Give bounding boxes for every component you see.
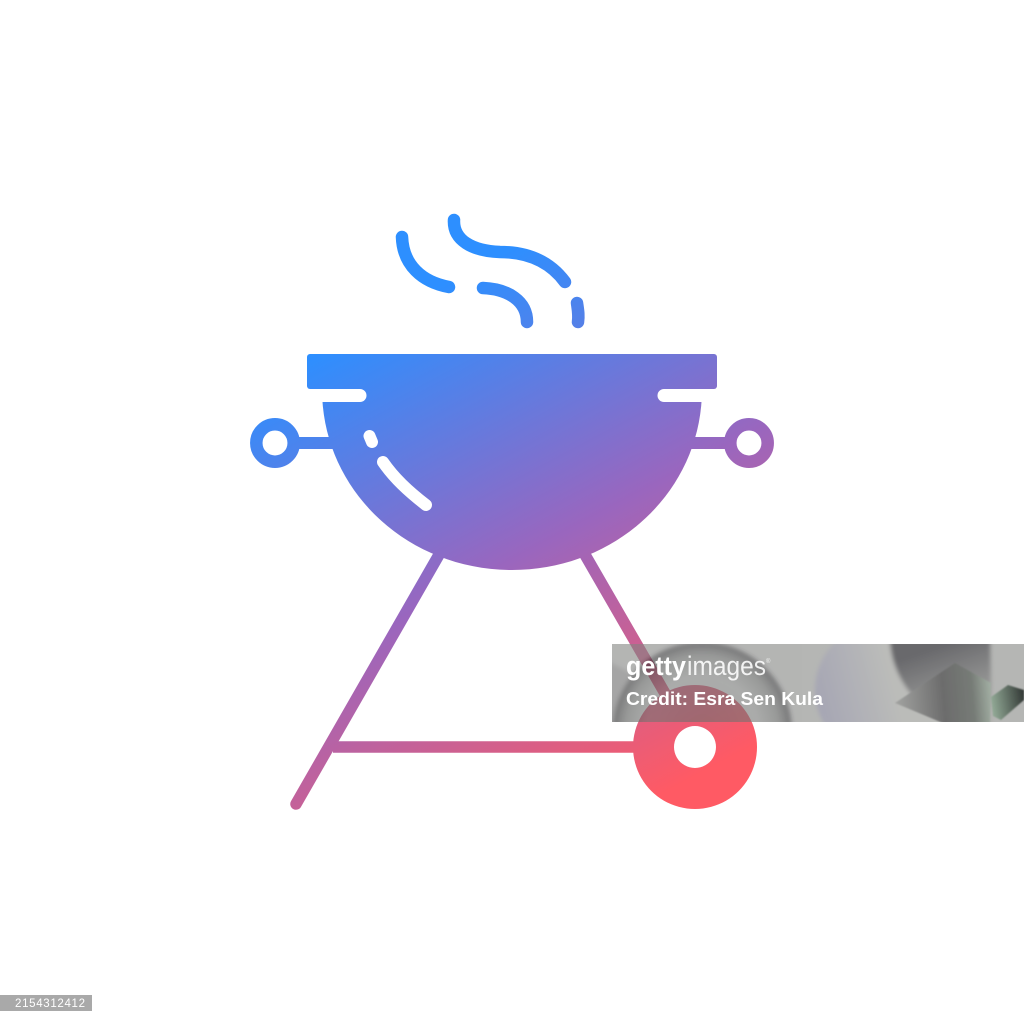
right handle [685,424,768,462]
image id tag: 2154312412 [15,998,85,1010]
icon: smoke wisps [402,220,578,322]
wheel [633,685,757,809]
watermark logo [626,651,771,681]
watermark logo: images [687,651,766,681]
bowl rim [307,354,717,389]
left handle [256,424,340,462]
watermark credit: Credit: Esra Sen Kula [626,688,824,709]
bowl highlights [370,436,426,505]
icon: barbecue grill [256,220,768,809]
rim notches [318,389,706,402]
grill bowl [307,354,717,570]
watermark logo: getty [626,651,686,681]
watermark logo: ® [766,658,771,665]
image id tag [0,995,92,1011]
grill legs and crossbar [296,553,670,804]
watermark banner [612,644,1024,722]
